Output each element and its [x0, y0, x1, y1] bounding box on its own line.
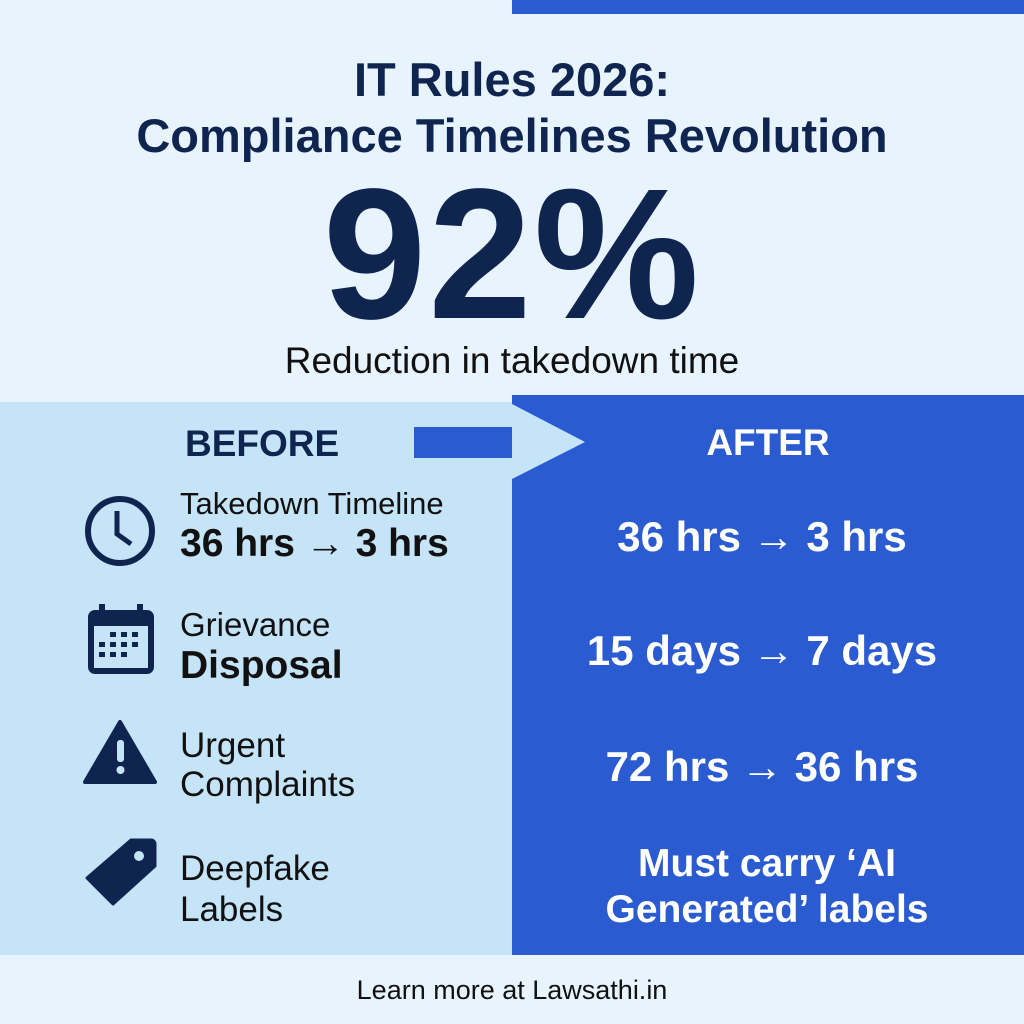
item: takedown — [180, 486, 449, 565]
item: takedown: Takedown Timeline — [180, 486, 444, 521]
heading: after: AFTER — [706, 422, 830, 463]
heading: before: BEFORE — [185, 423, 339, 464]
item: deepfake: Labels — [180, 890, 283, 929]
item: deepfake — [180, 849, 330, 929]
icon: tag — [85, 838, 156, 906]
after: deepfake — [606, 842, 928, 931]
title: Compliance Timelines Revolution — [136, 109, 888, 162]
after: deepfake: Must carry ‘AI — [638, 842, 896, 885]
footer: Learn more at Lawsathi.in — [357, 975, 667, 1005]
arrow — [414, 404, 585, 479]
item: grievance: Grievance — [180, 606, 330, 643]
item: urgent: Urgent — [180, 726, 285, 765]
item: grievance — [180, 606, 343, 687]
icon: calendar — [88, 604, 154, 674]
panel: after — [512, 395, 1024, 955]
item: takedown: 36 hrs → 3 hrs — [180, 522, 449, 565]
item: grievance: Disposal — [180, 644, 343, 687]
after: grievance: 15 days → 7 days — [587, 627, 937, 674]
after: urgent: 72 hrs → 36 hrs — [606, 743, 918, 790]
after: takedown: 36 hrs → 3 hrs — [617, 513, 907, 560]
item: deepfake: Deepfake — [180, 849, 330, 888]
stat caption: Reduction in takedown time — [285, 340, 739, 381]
title — [136, 53, 888, 162]
item: urgent: Complaints — [180, 765, 355, 804]
icon: clock — [85, 496, 155, 566]
panel: before — [0, 402, 512, 955]
big stat: 92% — [323, 151, 701, 358]
title: IT Rules 2026: — [354, 53, 670, 106]
item: urgent — [180, 726, 355, 804]
icon: warning — [83, 720, 157, 784]
after: deepfake: Generated’ labels — [606, 888, 928, 931]
top accent bar — [512, 0, 1024, 14]
